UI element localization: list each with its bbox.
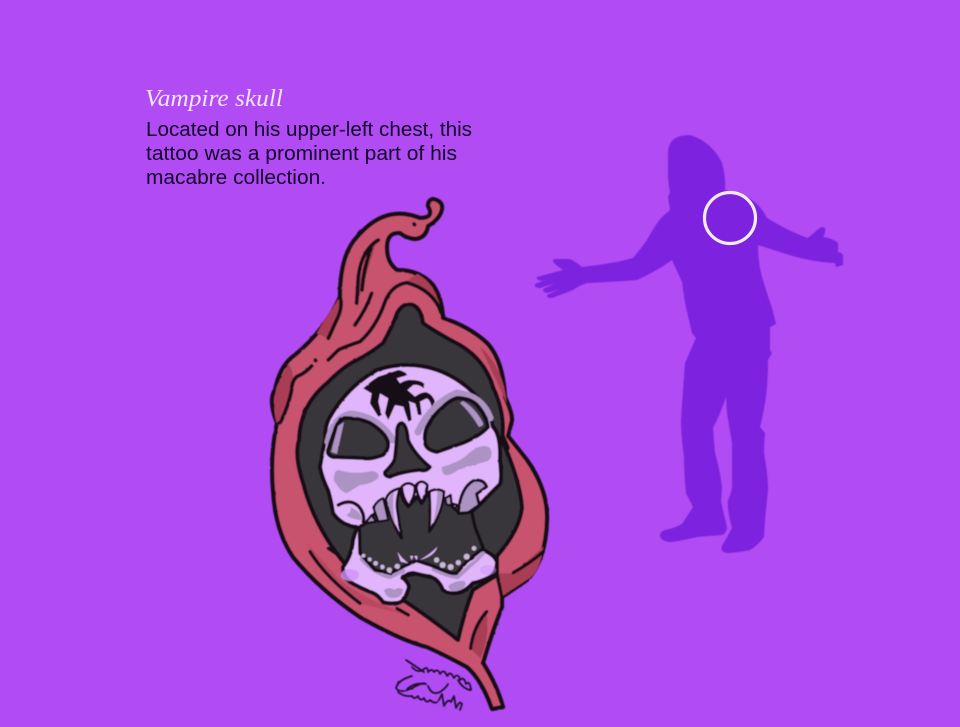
skull: [320, 365, 501, 603]
mouth and teeth: [338, 480, 487, 578]
spider mark: [363, 370, 435, 422]
description text: [146, 119, 472, 189]
upper cape shading: [274, 240, 507, 423]
description text: Located on his upper-left chest, this: [146, 119, 472, 141]
upper jaw curls: [338, 502, 364, 522]
illustration: vampire skull tattoo: [272, 199, 547, 710]
cape: [272, 199, 547, 709]
eye sockets: [328, 398, 488, 459]
silhouette: standing figure with arms outstretched: [535, 135, 843, 553]
fangs and incisors: [386, 482, 444, 538]
eye inner highlights: [331, 401, 484, 454]
upper cape fold lines: [280, 224, 508, 448]
lower fangs: [397, 547, 437, 563]
lower cape shading: [307, 543, 543, 658]
lower gum shade: [362, 553, 483, 577]
side teeth: [365, 495, 457, 523]
skull shape: [320, 365, 501, 603]
lower lip line: [402, 575, 432, 578]
artist signature: [396, 660, 471, 710]
eye halos: [328, 393, 490, 442]
jaw glow: [341, 569, 359, 581]
description text: macabre collection.: [146, 167, 326, 189]
fang shading: [388, 491, 442, 527]
skull shading: [334, 446, 492, 598]
nose: [385, 423, 430, 477]
hood interior: [297, 304, 522, 640]
location marker circle: [704, 192, 756, 244]
mouth: [359, 490, 483, 573]
description text: tattoo was a prominent part of his: [146, 143, 457, 165]
heading: vampire skull: Vampire skull: [145, 86, 283, 112]
lower cape fold lines: [310, 480, 543, 648]
lower teeth: [361, 546, 476, 573]
